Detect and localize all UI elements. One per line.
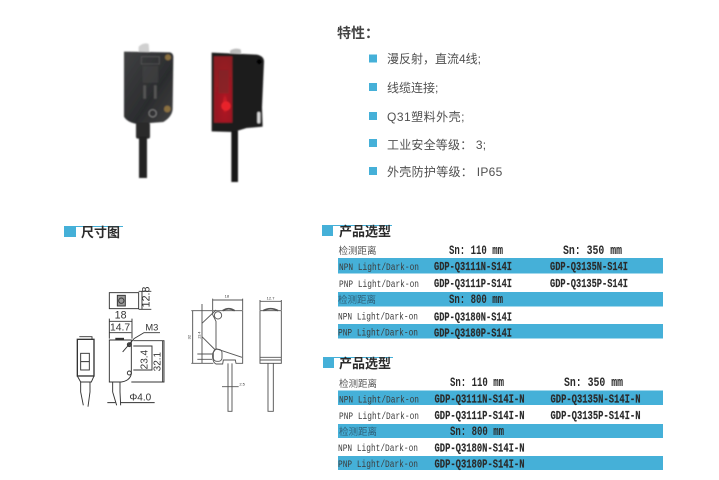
feature bullet item 2: 线缆连接; xyxy=(387,80,438,95)
table text: GDP-Q3111P-S14I xyxy=(434,277,512,291)
table text: Sn: 800 mm xyxy=(450,424,504,439)
table text: 检测距离 xyxy=(339,378,377,390)
row bands xyxy=(338,390,663,470)
table text: NPN Light/Dark-on xyxy=(338,312,418,324)
panel: product selection table 1 xyxy=(322,224,663,340)
table text: Sn: 350 mm xyxy=(564,375,623,390)
table text: GDP-Q3135P-S14I xyxy=(550,277,628,291)
table text xyxy=(338,375,640,472)
dimension labels: 18 xyxy=(115,310,127,322)
dimension labels: 14.7 xyxy=(110,323,130,334)
table heading: 产品选型 xyxy=(339,224,391,239)
table heading: 产品选型 xyxy=(339,356,391,371)
dimension labels: Φ4.0 xyxy=(129,393,152,404)
dimension labels xyxy=(110,287,164,404)
table text: GDP-Q3135P-S14I-N xyxy=(550,409,640,423)
table text: GDP-Q3135N-S14I xyxy=(550,260,628,274)
feature bullet item 1: 漫反射，直流4线; xyxy=(387,51,481,66)
dimension drawing: right xyxy=(187,293,281,411)
table text: GDP-Q3135N-S14I-N xyxy=(550,392,640,406)
table text: NPN Light/Dark-on xyxy=(339,262,419,274)
small dimension labels: 32 xyxy=(187,334,192,339)
table text: GDP-Q3180P-S14I-N xyxy=(434,458,524,472)
table text: PNP Light/Dark-on xyxy=(339,279,419,291)
top view of sensor xyxy=(109,291,151,309)
table text: PNP Light/Dark-on xyxy=(338,459,418,471)
table text: 检测距离 xyxy=(338,245,377,257)
dimension labels: M3 xyxy=(145,323,158,333)
table text: Sn: 350 mm xyxy=(563,243,622,258)
photo: sensor rear view xyxy=(124,43,173,178)
dimension labels: 12.8 xyxy=(140,287,152,307)
feature list xyxy=(369,51,503,179)
heading: dimension drawing xyxy=(64,225,123,240)
dimension labels: 32.1 xyxy=(153,351,164,371)
dimension labels: 23.4 xyxy=(139,349,150,369)
table text: GDP-Q3180N-S14I-N xyxy=(434,442,524,456)
small dimension labels xyxy=(187,293,275,386)
table text: NPN Light/Dark-on xyxy=(339,394,419,406)
table text: Sn: 110 mm xyxy=(450,375,504,390)
table text: PNP Light/Dark-on xyxy=(339,411,419,423)
table text: 检测距离 xyxy=(339,426,377,438)
table text: Sn: 800 mm xyxy=(449,292,503,307)
feature bullet item 5: 外壳防护等级： IP65 xyxy=(387,164,503,179)
table text: GDP-Q3111P-S14I-N xyxy=(434,409,524,423)
table text: PNP Light/Dark-on xyxy=(338,328,418,340)
table text: GDP-Q3180P-S14I xyxy=(434,326,512,340)
row bands xyxy=(338,258,663,338)
table text: NPN Light/Dark-on xyxy=(338,443,418,455)
small dimension labels: 12.7 xyxy=(267,295,275,300)
small dimension labels: 18 xyxy=(225,293,230,298)
side view of sensor xyxy=(107,319,164,405)
panel: product selection table 2 xyxy=(323,356,663,472)
front view of sensor xyxy=(77,337,94,407)
dimension drawing: left xyxy=(77,287,164,407)
feature bullet item 3: Q31塑料外壳; xyxy=(387,109,465,124)
photo: sensor front view with red window xyxy=(212,49,264,182)
feature bullet item 4: 工业安全等级： 3; xyxy=(387,137,486,152)
table text: 检测距离 xyxy=(338,294,376,306)
side outline drawing xyxy=(191,299,243,411)
table text: GDP-Q3180N-S14I xyxy=(434,310,512,324)
table text: GDP-Q3111N-S14I-N xyxy=(434,392,524,406)
table text xyxy=(338,243,628,340)
small dimension labels: 23.4 xyxy=(198,332,202,339)
small dimension labels: 2.5 xyxy=(239,381,246,386)
heading: dimension drawing: 尺寸图 xyxy=(81,225,120,240)
front outline drawing xyxy=(260,300,281,411)
table text: Sn: 110 mm xyxy=(449,243,503,258)
heading: features: 特性： xyxy=(337,25,379,41)
table text: GDP-Q3111N-S14I xyxy=(434,260,512,274)
